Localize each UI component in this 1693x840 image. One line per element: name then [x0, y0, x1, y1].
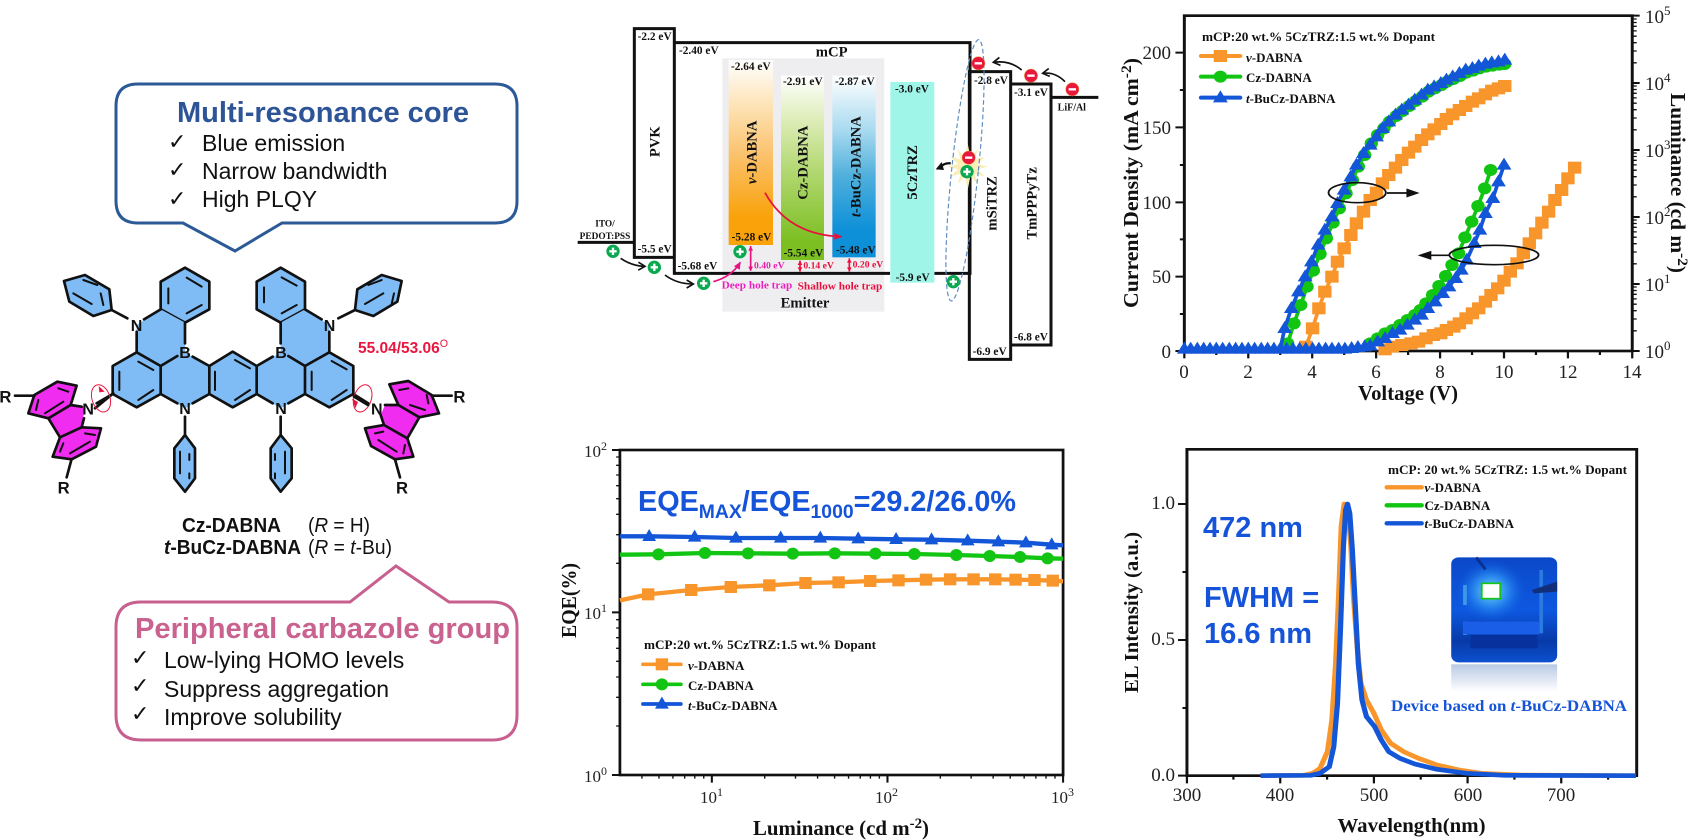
list: carbazole benefits: ✓ — [131, 674, 149, 699]
panel: energy level diagram — [578, 29, 1098, 359]
list: carbazole benefits — [131, 646, 404, 730]
axis titles: -2 — [1674, 253, 1690, 266]
layer names: 5CzTRZ — [905, 145, 921, 200]
bar: t-BuCz-DABNA — [832, 76, 876, 257]
axis tick labels: 10 — [584, 767, 601, 786]
axis tick labels: 4 — [1307, 362, 1317, 383]
energy labels: -2.91 eV — [783, 76, 823, 88]
axis titles: Luminance (cd m — [753, 816, 910, 840]
axis tick labels: 5 — [1664, 3, 1670, 18]
layer names: v-DABNA — [744, 120, 760, 184]
energy labels: PEDOT:PSS — [580, 232, 630, 242]
energy labels: -5.68 eV — [678, 260, 718, 272]
axis tick labels — [1151, 493, 1575, 806]
list: core features: Narrow bandwidth — [202, 158, 387, 184]
axis tick labels: 50 — [1152, 267, 1171, 288]
axis titles: ) — [1119, 58, 1143, 65]
axis tick labels: 10 — [1645, 141, 1664, 162]
axis tick labels: 0.0 — [1151, 765, 1175, 786]
axis titles: -2 — [910, 816, 922, 832]
layer names: mSiTRZ — [984, 176, 1000, 231]
axes, ticks and curves — [1175, 16, 1640, 358]
axis tick labels: 3 — [1664, 137, 1670, 152]
axis titles: Wavelength(nm) — [1338, 815, 1486, 837]
energy labels: -3.0 eV — [895, 84, 930, 96]
callout: multi-resonance core — [116, 84, 517, 251]
right carbazole: R — [453, 388, 465, 407]
axis tick labels: 10 — [1051, 788, 1068, 807]
axis tick labels: 0 — [1162, 342, 1171, 363]
list: core features — [168, 130, 387, 212]
energy labels: LiF/Al — [1058, 103, 1086, 114]
axis tick labels: 2 — [1664, 204, 1670, 219]
peak wavelength and FWHM labels: FWHM = — [1204, 582, 1319, 614]
axis tick labels: 1 — [717, 785, 723, 799]
axis tick labels: 300 — [1173, 785, 1201, 806]
layer names: mCP — [816, 45, 848, 61]
axis titles: EL Intensity (a.u.) — [1121, 532, 1143, 693]
molecule structure — [0, 268, 465, 497]
EQE value label: 1000 — [811, 501, 854, 523]
list: carbazole benefits: Suppress aggregation — [164, 676, 389, 702]
axis tick labels: 0 — [1664, 338, 1670, 353]
curves: t-BuCz-DABNA — [1184, 60, 1505, 349]
right carbazole: N — [371, 402, 383, 419]
axis titles: Current Density (mA cm — [1119, 86, 1143, 308]
layer names: Emitter — [781, 296, 830, 312]
axis tick labels: 400 — [1266, 785, 1294, 806]
peak wavelength and FWHM labels — [1203, 512, 1319, 650]
list: core features: ✓ — [168, 158, 186, 183]
axis tick labels: 2 — [892, 785, 898, 799]
axis titles: -2 — [1119, 65, 1135, 78]
axis titles: Voltage (V) — [1358, 381, 1458, 405]
trap labels: Deep hole trap — [722, 279, 792, 291]
curves: Cz-DABNA — [1288, 64, 1505, 343]
axis titles: Luminance (cd m — [1666, 93, 1690, 250]
axis tick labels — [584, 439, 1074, 807]
annotation ellipses and arrows — [1329, 183, 1539, 265]
axis titles: ) — [1666, 266, 1690, 273]
energy labels: -2.87 eV — [835, 76, 875, 88]
axis tick labels: 10 — [1645, 7, 1664, 28]
axis tick labels: 2 — [601, 439, 607, 453]
energy labels: -6.8 eV — [1014, 332, 1049, 344]
axis tick labels: 2 — [1243, 362, 1253, 383]
device photo — [1451, 557, 1557, 692]
axis titles: EQE(%) — [557, 563, 581, 638]
energy labels: -5.48 eV — [836, 244, 876, 256]
atom labels: N and B: N — [275, 401, 287, 418]
dihedral angle label: 55.04/53.06 — [358, 340, 443, 357]
atom labels: N and B: N — [131, 318, 142, 335]
core rings — [64, 268, 402, 492]
axis tick labels: 0.5 — [1151, 629, 1175, 650]
callout: peripheral carbazole group — [116, 566, 517, 740]
axis tick labels: 600 — [1454, 785, 1482, 806]
curves: v-DABNA — [1306, 86, 1575, 349]
list: core features: High PLQY — [202, 186, 317, 212]
axis tick labels: 10 — [584, 442, 601, 461]
trap labels: 0.20 eV — [853, 259, 883, 270]
energy transfer arrows — [713, 193, 852, 282]
axis tick labels: 14 — [1622, 362, 1642, 383]
electron carriers — [962, 57, 1079, 164]
list: core features: Blue emission — [202, 130, 345, 156]
legend text — [1202, 29, 1436, 106]
axis tick labels: 150 — [1142, 118, 1171, 139]
legend text — [1388, 462, 1628, 531]
axes, ticks and curves — [612, 450, 1063, 783]
energy labels — [580, 31, 1086, 358]
axis tick labels: 10 — [1645, 208, 1664, 229]
legend text — [644, 637, 877, 713]
axis tick labels: 0 — [601, 764, 607, 778]
atom labels: N and B: B — [179, 345, 191, 362]
left carbazole: R — [58, 478, 70, 497]
axis titles — [1119, 58, 1690, 405]
carrier transport arrows — [621, 62, 1065, 284]
axis tick labels: 100 — [1142, 193, 1171, 214]
energy labels: -2.8 eV — [974, 75, 1009, 87]
panel: current density and luminance chart — [1119, 3, 1690, 405]
legend text: Cz-DABNA — [1424, 498, 1491, 513]
axis tick labels: 0 — [1179, 362, 1189, 383]
energy labels: -2.64 eV — [731, 61, 771, 73]
axis tick labels: 700 — [1547, 785, 1575, 806]
legend lines — [643, 664, 681, 704]
trap labels: 0.40 eV — [754, 260, 785, 271]
list: core features: ✓ — [168, 187, 186, 212]
energy labels: ITO/ — [595, 220, 615, 230]
list: carbazole benefits: ✓ — [131, 646, 149, 671]
bar: v-DABNA — [729, 60, 773, 245]
axis tick labels: 1.0 — [1151, 493, 1175, 514]
axis tick labels: 10 — [700, 788, 717, 807]
axis tick labels: 12 — [1558, 362, 1578, 383]
left carbazole — [0, 382, 114, 497]
legend lines — [1387, 487, 1421, 523]
axis tick labels: 10 — [1494, 362, 1514, 383]
axis tick labels: 10 — [1645, 342, 1664, 363]
right carbazole: R — [396, 478, 408, 497]
energy labels: -5.9 eV — [896, 272, 930, 284]
atom labels: N and B — [131, 318, 335, 418]
compound names: Cz-DABNA — [182, 515, 281, 537]
legend lines — [1201, 56, 1240, 98]
axis tick labels: 6 — [1371, 362, 1381, 383]
legend text: Cz-DABNA — [1246, 70, 1312, 85]
axis titles — [557, 563, 929, 840]
atom labels: N and B: B — [275, 345, 287, 362]
legend text: t-BuCz-DABNA — [1424, 516, 1515, 531]
exciton starburst — [948, 143, 988, 190]
curve: Cz-DABNA — [620, 553, 1063, 559]
recombination zone ellipse — [938, 38, 992, 302]
axis tick labels: 3 — [1068, 785, 1074, 799]
compound names: t-BuCz-DABNA — [164, 537, 301, 559]
legend text: t-BuCz-DABNA — [1246, 91, 1336, 106]
energy labels: -2.2 eV — [638, 31, 672, 43]
axis tick labels: 1 — [601, 601, 607, 615]
legend text: v-DABNA — [688, 658, 745, 673]
curve: t-BuCz-DABNA spectrum — [1261, 504, 1636, 776]
device caption: Device based on t-BuCz-DABNA — [1391, 698, 1628, 715]
EQE value label: MAX — [699, 501, 742, 523]
axis tick labels — [1142, 3, 1671, 383]
EQE value label: /EQE — [742, 486, 811, 518]
axis tick labels: 200 — [1142, 43, 1171, 64]
right carbazole — [350, 381, 465, 497]
energy labels: -5.5 eV — [638, 244, 672, 256]
energy labels: -3.1 eV — [1014, 87, 1049, 99]
compound names: (R = t-Bu) — [308, 537, 392, 559]
axis titles — [1121, 532, 1486, 837]
panel: electroluminescence spectrum chart — [1121, 449, 1637, 837]
energy labels: -5.54 eV — [784, 248, 824, 260]
curve: t-BuCz-DABNA — [620, 536, 1063, 545]
atom labels: N and B: N — [179, 401, 191, 418]
axes, ticks and curves — [1178, 449, 1637, 783]
energy labels: -5.28 eV — [732, 232, 772, 244]
bar: 5CzTRZ — [890, 82, 934, 283]
legend text: v-DABNA — [1424, 480, 1481, 495]
dihedral angle label: O — [440, 338, 448, 350]
emitter background — [722, 58, 884, 312]
heading: multi-resonance core: Multi-resonance core — [177, 97, 469, 129]
peak wavelength and FWHM labels: 472 nm — [1203, 512, 1303, 544]
layer names: Cz-DABNA — [795, 125, 811, 200]
axis tick labels: 10 — [584, 604, 601, 623]
trap labels: 0.14 eV — [803, 260, 834, 271]
EQE value label: EQE — [638, 486, 699, 518]
compound names: (R = H) — [308, 515, 370, 537]
list: carbazole benefits: Improve solubility — [164, 704, 342, 730]
legend text: t-BuCz-DABNA — [688, 698, 778, 713]
bar: Cz-DABNA — [781, 76, 824, 260]
axis tick labels: 10 — [1645, 275, 1664, 296]
axis tick labels: 500 — [1360, 785, 1388, 806]
axis tick labels: 10 — [875, 788, 892, 807]
axis tick labels: 4 — [1664, 70, 1671, 85]
axis titles: ) — [922, 816, 929, 840]
axis tick labels: 10 — [1645, 74, 1664, 95]
list: carbazole benefits: ✓ — [131, 702, 149, 727]
heading: peripheral carbazole group: Peripheral carbazole group — [135, 613, 510, 645]
trap labels — [722, 259, 883, 292]
curve: v-DABNA spectrum — [1261, 504, 1636, 776]
axis tick labels: 1 — [1664, 271, 1670, 286]
legend text: mCP:20 wt.% 5CzTRZ:1.5 wt.% Dopant — [1202, 29, 1436, 44]
layer names: TmPPPyTz — [1024, 167, 1040, 240]
axis tick labels: 8 — [1435, 362, 1445, 383]
layer names — [647, 45, 1040, 312]
EQE value label: =29.2/26.0% — [854, 486, 1016, 518]
legend text: mCP: 20 wt.% 5CzTRZ: 1.5 wt.% Dopant — [1388, 462, 1628, 477]
peak wavelength and FWHM labels: 16.6 nm — [1204, 618, 1312, 650]
trap labels: Shallow hole trap — [798, 280, 882, 292]
energy labels: -6.9 eV — [973, 346, 1007, 358]
panel: EQE versus luminance chart — [557, 439, 1074, 840]
layer names: PVK — [647, 126, 663, 157]
list: core features: ✓ — [168, 130, 186, 155]
list: carbazole benefits: Low-lying HOMO levels — [164, 647, 404, 673]
compound names — [164, 515, 392, 559]
layer frames — [578, 29, 1098, 359]
energy labels: -2.40 eV — [679, 45, 719, 57]
legend text: Cz-DABNA — [688, 678, 754, 693]
left carbazole: N — [82, 402, 94, 419]
legend text: v-DABNA — [1246, 50, 1303, 65]
curve: v-DABNA — [620, 579, 1063, 600]
atom labels: N and B: N — [324, 318, 335, 335]
layer names: t-BuCz-DABNA — [848, 116, 864, 217]
legend text: mCP:20 wt.% 5CzTRZ:1.5 wt.% Dopant — [644, 637, 877, 652]
hole carriers — [606, 165, 974, 290]
